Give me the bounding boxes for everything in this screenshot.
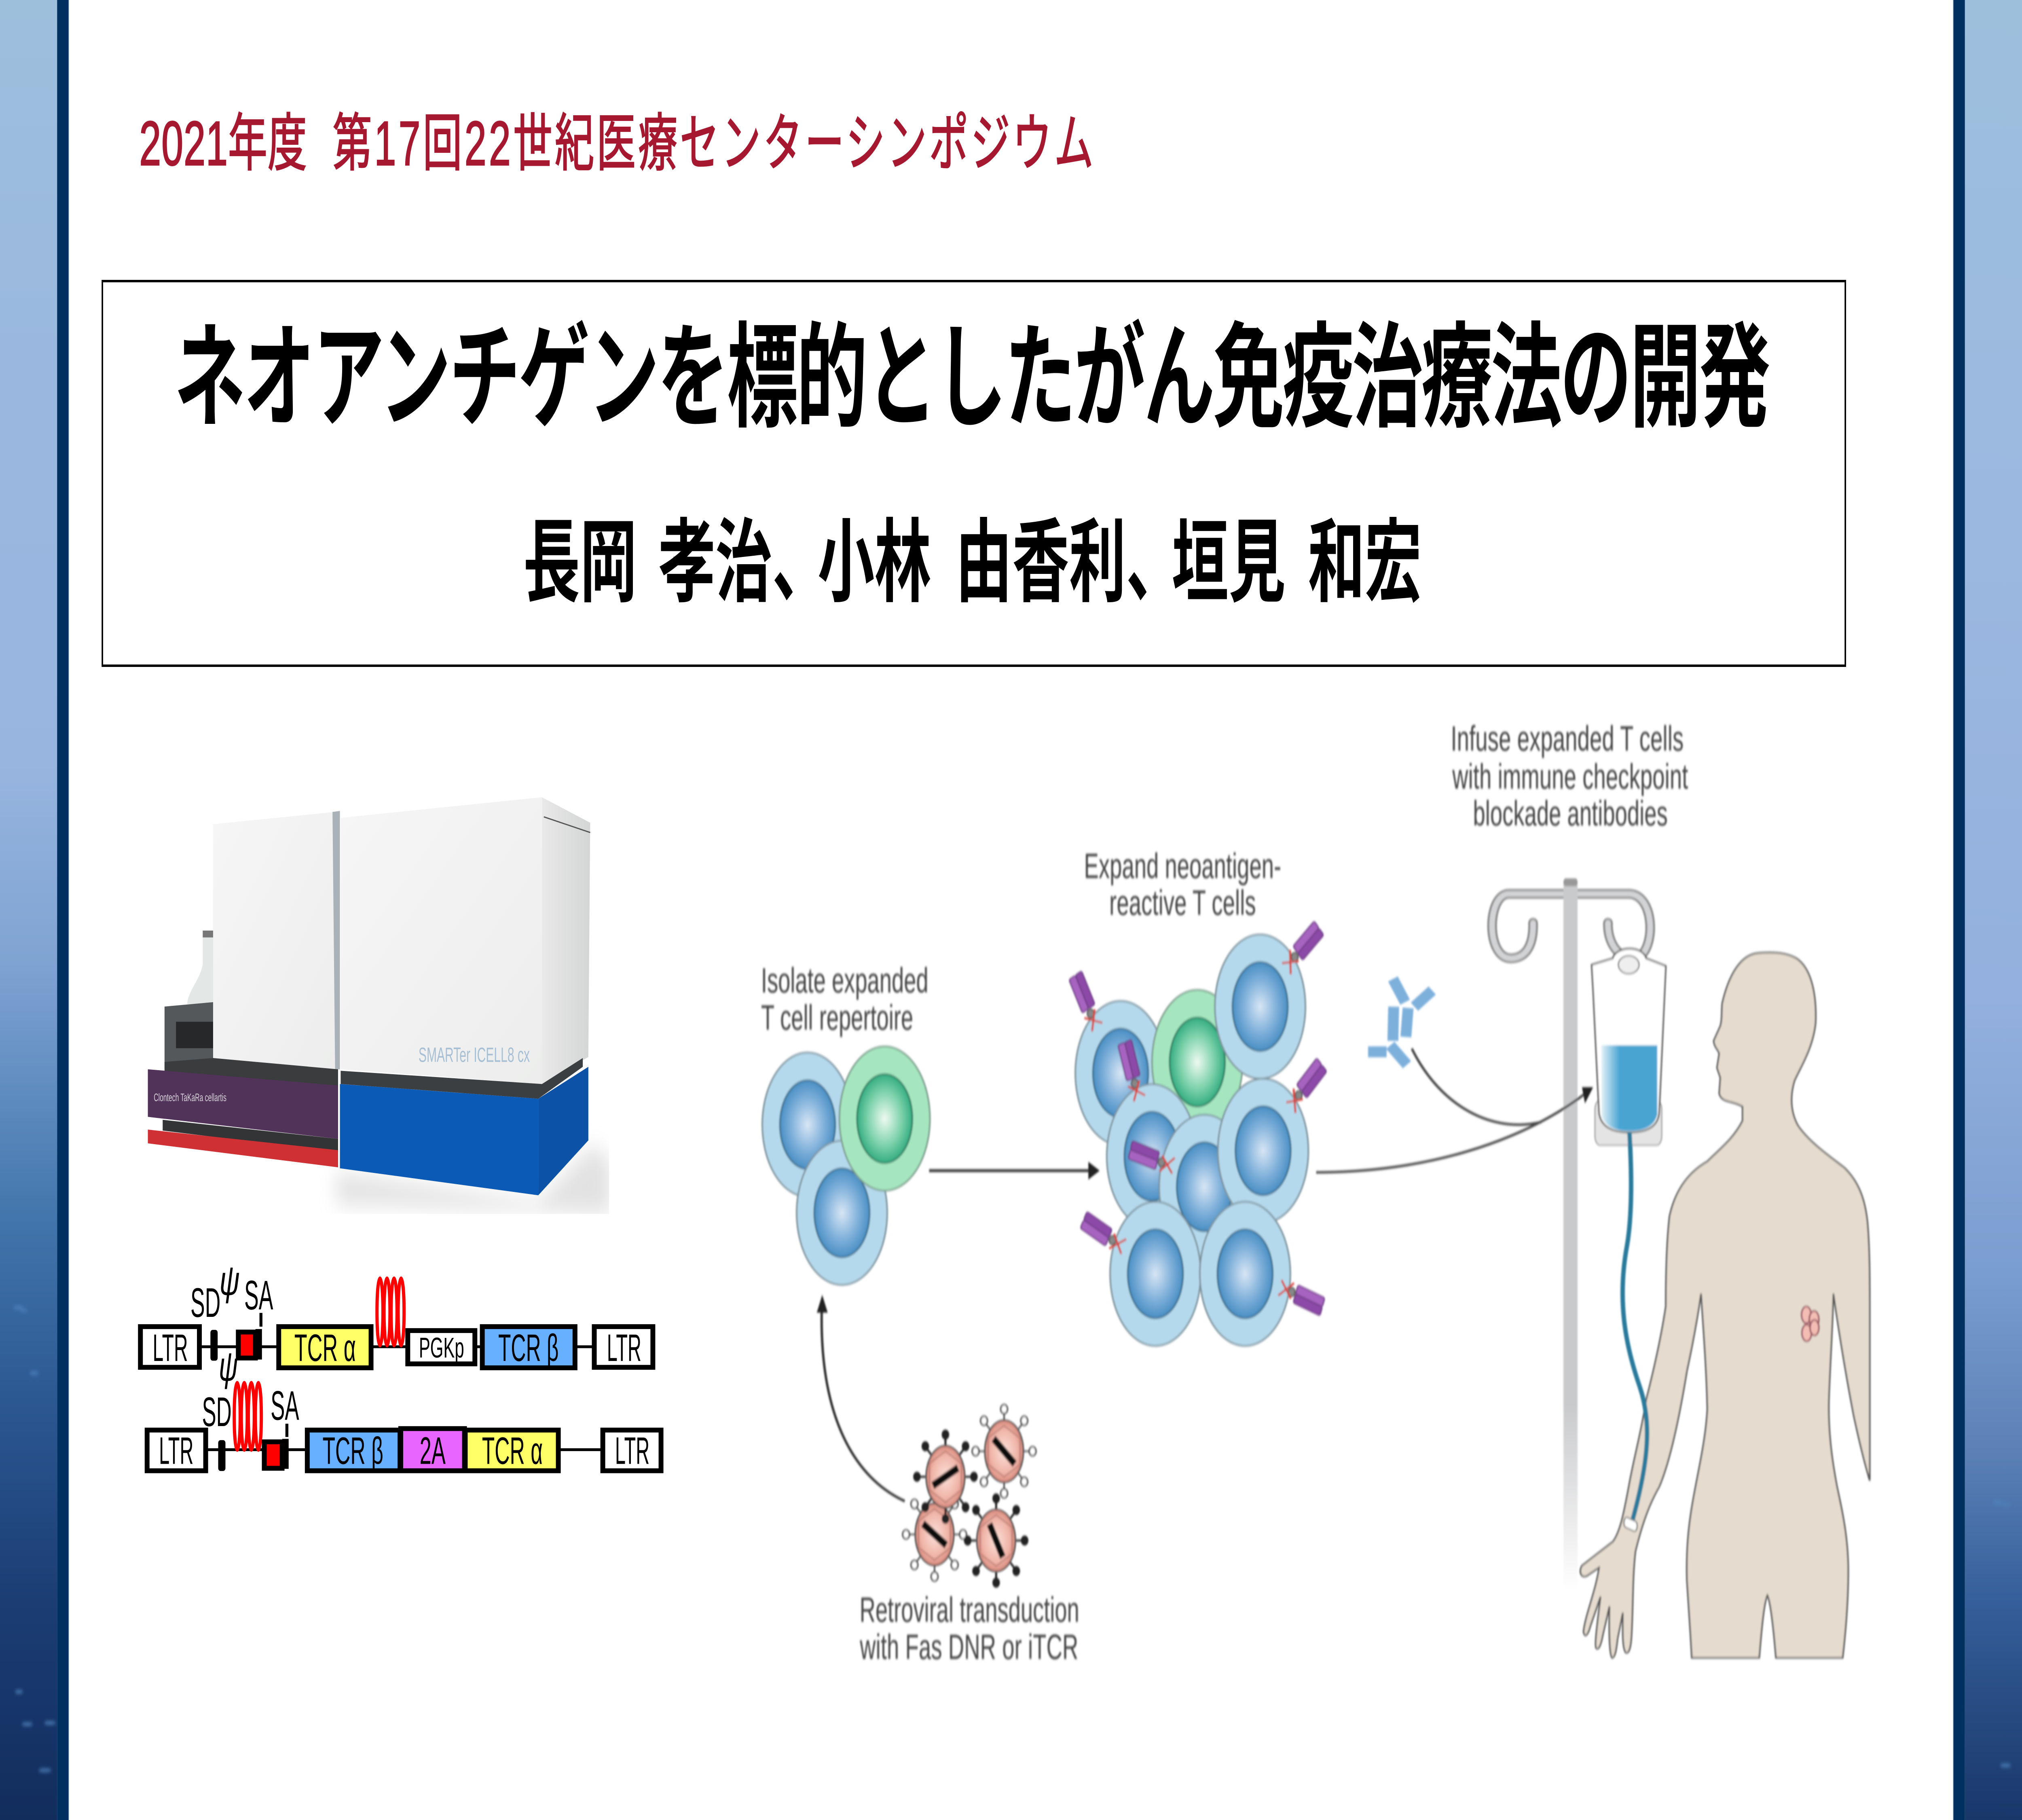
row 1 labels: LTR — [607, 1326, 641, 1369]
T cell therapy workflow illustration — [761, 719, 1870, 1667]
right upper panel — [341, 797, 542, 1084]
SD mark — [212, 1331, 216, 1359]
catheter connector — [1623, 1516, 1638, 1532]
brand label: Clontech TaKaRa cellartis — [154, 1092, 226, 1104]
label: isolate: T cell repertoire — [761, 998, 913, 1037]
SA tick — [286, 1424, 288, 1437]
dark side block — [165, 1002, 213, 1069]
label: expand — [1084, 847, 1281, 923]
label: retroviral transduction: with Fas DNR or iTCR — [860, 1627, 1078, 1667]
right side band — [1953, 0, 2022, 1820]
row 2 labels: LTR — [615, 1429, 649, 1472]
row 2 labels: TCR α — [482, 1429, 543, 1472]
construct row 2 — [147, 1344, 661, 1472]
label: expand: reactive T cells — [1109, 883, 1256, 923]
row 2 labels: TCR β — [322, 1429, 383, 1472]
authors: 小林 — [818, 512, 931, 614]
authors: 和宏 — [1308, 512, 1422, 614]
arrow: isolate to expand — [929, 1162, 1100, 1179]
label: infuse: Infuse expanded T cells — [1451, 719, 1684, 758]
label: infuse: with immune checkpoint — [1452, 757, 1688, 796]
label: isolate: Isolate expanded — [761, 961, 929, 1000]
main title: ネオアンチゲンを標的としたがん免疫治療法の開発 — [174, 314, 1770, 442]
row 2 labels: ψ — [219, 1344, 238, 1390]
arrow: antibodies to IV bag — [1412, 1049, 1541, 1125]
left side band — [0, 0, 69, 1820]
row 1 labels: SD — [190, 1280, 220, 1326]
antibodies — [1368, 979, 1432, 1064]
expanded T cell cluster — [1069, 921, 1327, 1346]
label: retroviral transduction — [860, 1590, 1079, 1667]
arrow: transduction to isolate — [817, 1295, 905, 1501]
row 2 labels: SD — [202, 1389, 232, 1435]
dark bands — [165, 1058, 338, 1086]
row 1 labels: SA — [244, 1272, 273, 1318]
bottle — [187, 937, 213, 1004]
row 1 labels: ψ — [220, 1258, 240, 1304]
tumor — [1802, 1306, 1819, 1341]
row 1 labels: TCR α — [294, 1326, 356, 1369]
row 1 labels — [153, 1258, 641, 1369]
T cell receptors — [1069, 921, 1327, 1316]
IV tube — [1622, 1132, 1647, 1520]
symposium heading: 第17回22世紀医療センターシンポジウム — [333, 109, 1093, 179]
retrovirus particles — [903, 1405, 1036, 1588]
red coil — [377, 1278, 404, 1346]
packaging signal box — [238, 1332, 255, 1358]
label: infuse — [1451, 719, 1688, 833]
vector construct diagram — [140, 1258, 661, 1472]
symposium heading: 2021年度 — [139, 109, 307, 179]
row 1 labels: PGKp — [419, 1332, 464, 1364]
purple base — [148, 1069, 338, 1139]
SD mark — [220, 1441, 224, 1470]
row 1 labels: LTR — [153, 1326, 188, 1369]
arrow: T cells to IV bag — [1316, 1087, 1593, 1172]
left upper panel — [213, 812, 335, 1069]
terminal repeats and genes — [140, 1327, 199, 1367]
row 2 labels: LTR — [159, 1429, 193, 1472]
row 1 labels: TCR β — [498, 1326, 559, 1369]
authors: 由香利、 — [956, 512, 1183, 614]
label: infuse: blockade antibodies — [1473, 794, 1668, 833]
IV stand — [1492, 878, 1650, 1591]
terminal repeats and genes — [147, 1430, 206, 1471]
isolated T cell group — [762, 1046, 930, 1285]
authors: 垣見 — [1172, 512, 1286, 614]
machine label: SMARTer ICELL8 cx — [419, 1043, 530, 1067]
patient body — [1580, 952, 1870, 1658]
label: isolate — [761, 961, 929, 1037]
label: retroviral transduction: Retroviral transduction — [860, 1590, 1079, 1630]
IV bag — [1592, 949, 1666, 1145]
row 2 labels: SA — [271, 1383, 299, 1429]
authors: 孝治、 — [658, 512, 829, 614]
row 2 labels: 2A — [420, 1429, 446, 1472]
SA tick — [260, 1313, 262, 1327]
title box — [102, 281, 1845, 666]
authors: 長岡 — [523, 512, 637, 614]
row 2 labels — [159, 1344, 649, 1472]
blue base — [340, 1084, 538, 1195]
authors — [523, 512, 1422, 614]
sequencer machine photo — [148, 797, 611, 1214]
red base — [148, 1130, 338, 1167]
label: expand: Expand neoantigen- — [1084, 847, 1281, 886]
packaging signal box — [264, 1442, 282, 1468]
red coil — [234, 1382, 261, 1450]
construct row 1 — [140, 1258, 653, 1369]
